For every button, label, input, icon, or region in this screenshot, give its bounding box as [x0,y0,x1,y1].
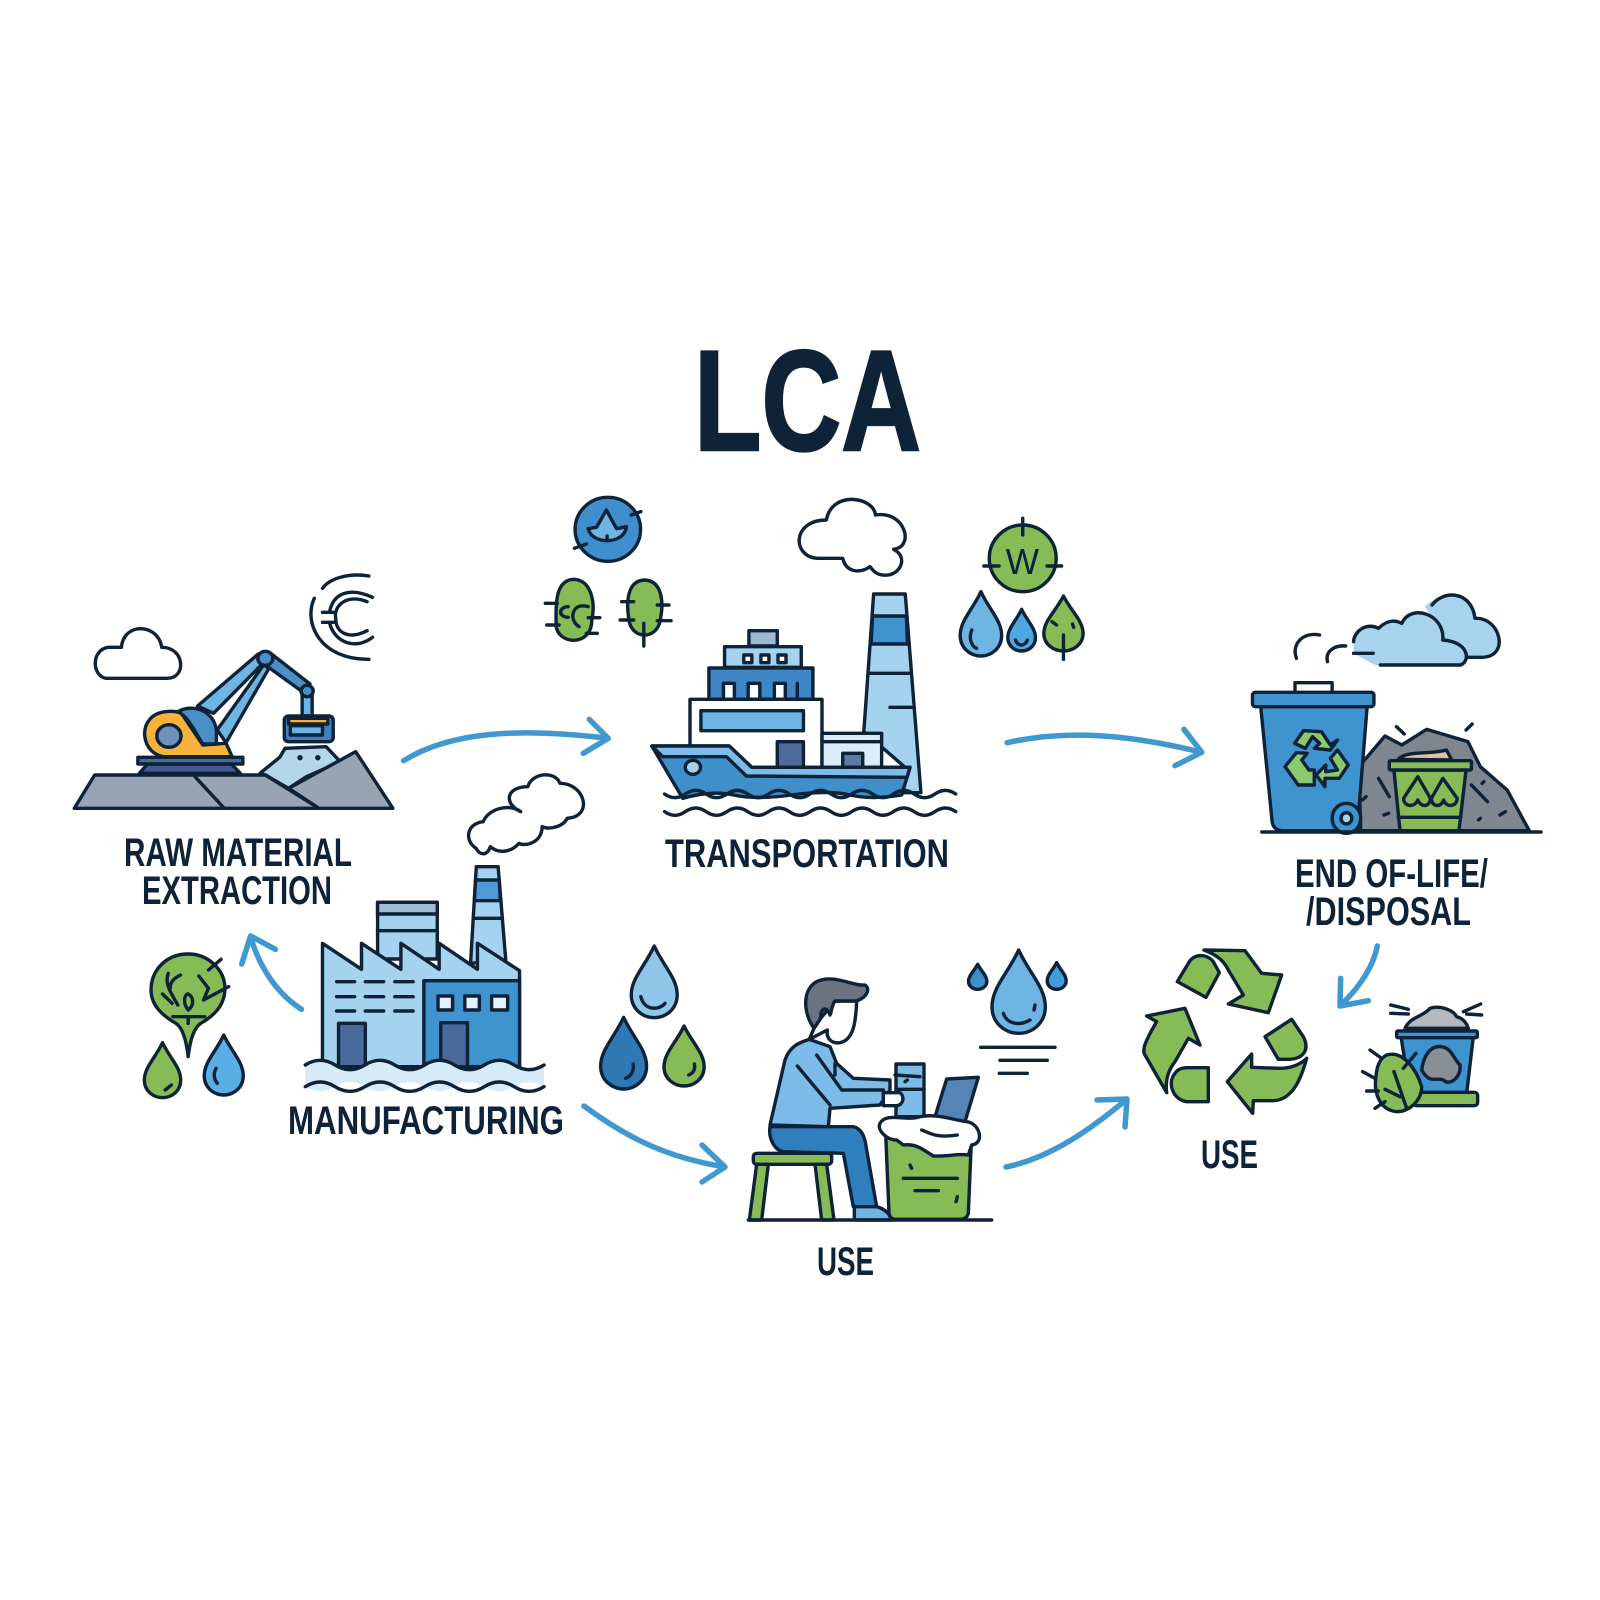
arrow: manufacturing to raw material [242,936,301,1009]
panel: raw material extraction [74,575,393,913]
label: manufacturing: MANUFACTURING [288,1099,564,1143]
panel: use [748,950,1066,1284]
icon: water drops with level lines [968,950,1066,1073]
label: raw material extraction: EXTRACTION [142,869,332,913]
label: use: USE [817,1240,874,1284]
label: raw material extraction [124,831,352,913]
label: transportation: TRANSPORTATION [665,832,949,876]
icon: excavator on mine [74,575,393,808]
panel: transportation [545,497,1083,876]
label: end of life disposal: /DISPOSAL [1306,890,1471,934]
icon: recycling symbol [1144,950,1307,1113]
arrow: transportation to end of life [1007,729,1202,766]
arrow: disposal to recycling [1340,946,1377,1006]
icon: waste bin with leaf [1363,1004,1482,1112]
label: raw material extraction: RAW MATERIAL [124,831,352,875]
panel: recycling use [1144,950,1482,1177]
label: end of life disposal: END OF-LIFE/ [1295,852,1488,896]
arrow: extraction to transportation [404,719,608,761]
icon: water and wood indicators: W [1006,542,1040,582]
panel: manufacturing [144,775,583,1143]
title: LCA [694,322,921,481]
label: end of life disposal [1295,852,1488,934]
icons: water circle and carbon trees [545,497,671,646]
arrow: use to recycling [1006,1099,1127,1167]
icon: recycling bin and landfill [1252,683,1541,833]
icon: pollution cloud [1295,595,1499,665]
icon: ship smoke cloud [799,499,905,575]
panel: end of life disposal [1252,595,1541,934]
icon: water droplets [601,946,704,1089]
icon: water and wood indicators [960,518,1083,659]
icon: person at workstation [748,979,992,1220]
icon: cargo ship [652,594,956,815]
icon: tree marker and droplets [144,954,243,1098]
label: use recycling: USE [1201,1133,1258,1177]
arrow: manufacturing to use [584,1106,725,1182]
icon: factory [305,867,544,1091]
icon: smoke cloud [469,775,583,854]
